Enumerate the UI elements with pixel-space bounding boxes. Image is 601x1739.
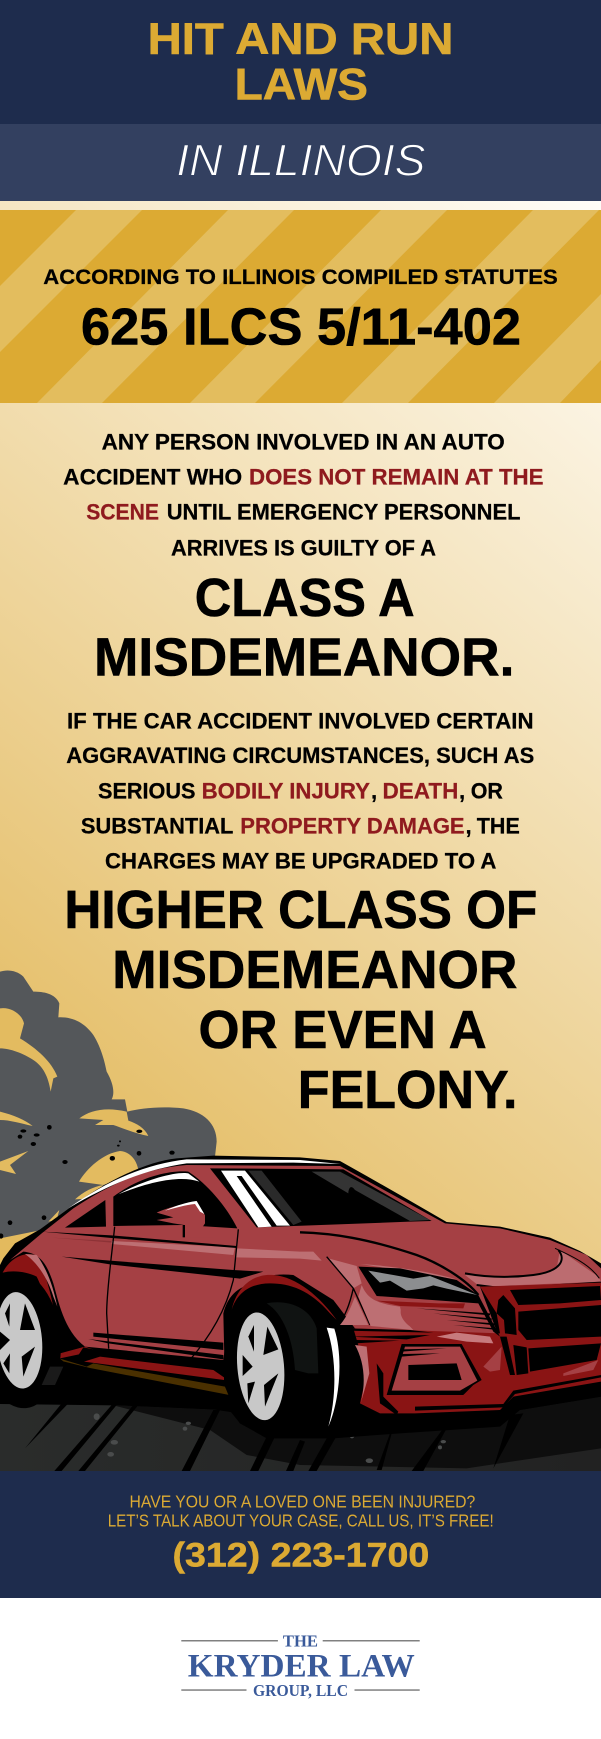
- front wheel: [233, 1311, 289, 1422]
- main text: aggravating circumstances: DEATH: [382, 778, 458, 803]
- road: [0, 1387, 601, 1471]
- main text: aggravating circumstances: ,: [459, 778, 465, 803]
- title: LAWS: [235, 60, 368, 109]
- header panel: [0, 0, 601, 124]
- car body: [10, 1165, 601, 1360]
- callout: higher class of misdemeanor or felony: MISDEMEANOR: [112, 940, 517, 1000]
- main text: aggravating circumstances: PROPERTY DAMAGE: [240, 813, 465, 838]
- main text: aggravating circumstances: OR: [471, 778, 503, 803]
- statute panel: 625 ILCS 5/11-402: [81, 298, 521, 356]
- main text: aggravating circumstances: IF THE CAR ACCIDENT INVOLVED CERTAIN: [67, 708, 534, 733]
- callout: higher class of misdemeanor or felony: HIGHER CLASS OF: [64, 880, 537, 940]
- main text: first statement: DOES NOT REMAIN AT THE: [249, 464, 544, 489]
- page background gradient: [0, 201, 601, 1472]
- title: [148, 15, 453, 109]
- main text: aggravating circumstances: CHARGES MAY BE UPGRADED TO A: [105, 848, 497, 873]
- bumper speed lines: [347, 1301, 497, 1343]
- main text: first statement: SCENE: [86, 499, 159, 524]
- grille: [497, 1286, 601, 1375]
- callout: class A misdemeanor: CLASS A: [195, 568, 415, 628]
- statute panel: [0, 210, 601, 403]
- road and car illustration: [0, 1156, 601, 1471]
- call to action panel: HAVE YOU OR A LOVED ONE BEEN INJURED?: [130, 1492, 476, 1512]
- statute panel: ACCORDING TO ILLINOIS COMPILED STATUTES: [43, 265, 558, 289]
- subtitle band: IN ILLINOIS: [176, 137, 426, 186]
- car silhouette: [0, 1156, 601, 1438]
- windows: [65, 1168, 432, 1228]
- callout: class A misdemeanor: MISDEMEANOR.: [94, 627, 514, 687]
- rear arch: [3, 1254, 97, 1358]
- main text: first statement: UNTIL EMERGENCY PERSONNEL: [167, 499, 520, 524]
- call to action panel: LET’S TALK ABOUT YOUR CASE, CALL US, IT’S FREE!: [108, 1511, 494, 1531]
- subtitle band: [0, 124, 601, 201]
- callout: higher class of misdemeanor or felony: FELONY.: [298, 1060, 517, 1120]
- logo: [181, 1632, 420, 1700]
- main text: aggravating circumstances: SERIOUS: [98, 778, 196, 803]
- callout: higher class of misdemeanor or felony: [64, 880, 537, 1120]
- call to action panel: (312) 223-1700: [172, 1537, 429, 1575]
- main text: first statement: ACCIDENT WHO: [63, 464, 242, 489]
- front bumper: [353, 1283, 601, 1415]
- door and body lines: [42, 1227, 362, 1395]
- hood lines: [300, 1232, 601, 1325]
- main text: first statement: ANY PERSON INVOLVED IN AN AUTO: [102, 429, 505, 454]
- logo: THE: [283, 1632, 318, 1651]
- logo: GROUP, LLC: [253, 1681, 348, 1700]
- main text: aggravating circumstances: BODILY INJURY: [202, 778, 370, 803]
- front wheel arch and tire: [223, 1275, 360, 1437]
- smoke cloud: [0, 970, 217, 1239]
- main text: aggravating circumstances: ,: [371, 778, 377, 803]
- main text: aggravating circumstances: AGGRAVATING CIRCUMSTANCES, SUCH AS: [66, 743, 534, 768]
- headlight: [358, 1267, 500, 1337]
- rear wheel: [0, 1268, 66, 1412]
- callout: class A misdemeanor: [94, 568, 514, 687]
- main text: first statement: ARRIVES IS GUILTY OF A: [171, 535, 436, 560]
- main text: aggravating circumstances: [66, 708, 534, 873]
- air intake: [387, 1344, 510, 1403]
- side mirror: [157, 1201, 217, 1238]
- bumper lip: [415, 1375, 601, 1411]
- roof highlight: [68, 1159, 341, 1208]
- logo: KRYDER LAW: [188, 1649, 415, 1685]
- title: HIT AND RUN: [148, 15, 453, 64]
- main text: first statement: [63, 429, 543, 560]
- main text: aggravating circumstances: SUBSTANTIAL: [81, 813, 233, 838]
- main text: aggravating circumstances: THE: [477, 813, 520, 838]
- call to action panel: [0, 1471, 601, 1598]
- callout: higher class of misdemeanor or felony: OR EVEN A: [198, 1000, 487, 1060]
- main text: aggravating circumstances: ,: [466, 813, 472, 838]
